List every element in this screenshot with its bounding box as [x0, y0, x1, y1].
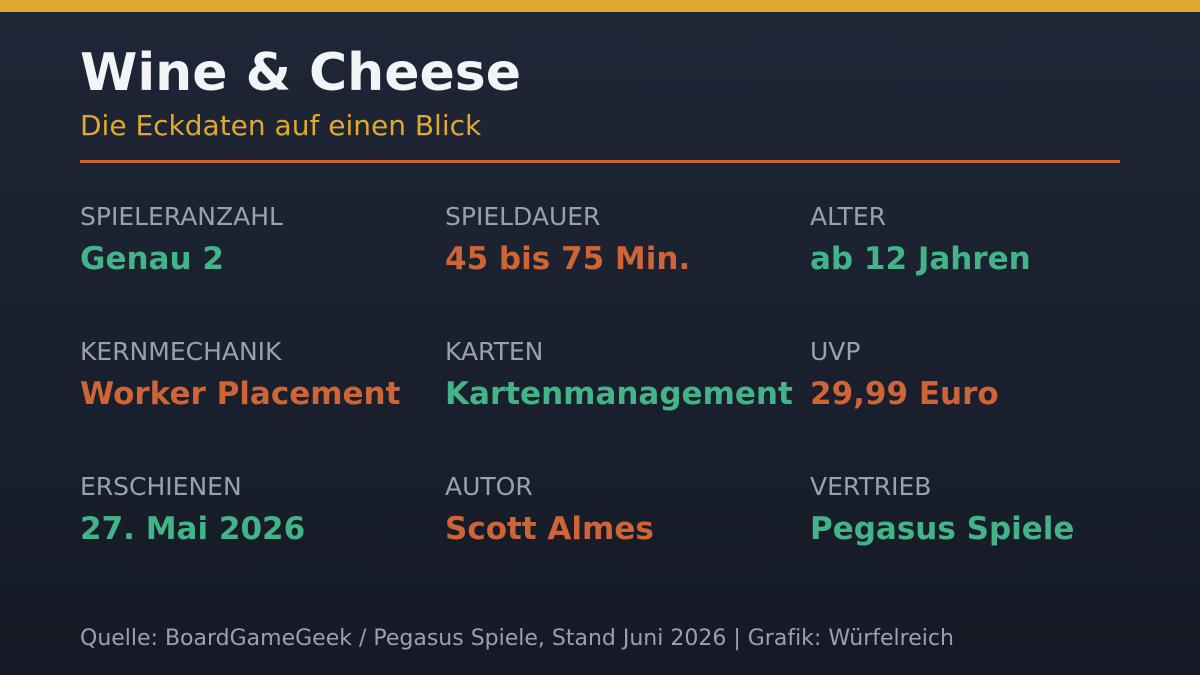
fact: Alter: ALTER	[810, 202, 886, 231]
fact: Spieleranzahl: Genau 2	[80, 241, 224, 277]
fact: UVP: 29,99 Euro	[810, 376, 999, 412]
fact: Erschienen: ERSCHIENEN	[80, 472, 242, 501]
fact: Kernmechanik	[80, 337, 401, 412]
fact: Karten: KARTEN	[445, 337, 543, 366]
fact: Alter: ab 12 Jahren	[810, 241, 1031, 277]
top accent bar	[0, 0, 1200, 12]
fact: UVP: UVP	[810, 337, 860, 366]
header divider	[80, 160, 1120, 163]
fact: Vertrieb: VERTRIEB	[810, 472, 931, 501]
fact: Kernmechanik: KERNMECHANIK	[80, 337, 282, 366]
fact: Autor	[445, 472, 654, 547]
fact: Spieldauer: 45 bis 75 Min.	[445, 241, 690, 277]
fact: Autor: AUTOR	[445, 472, 533, 501]
fact: Vertrieb: Pegasus Spiele	[810, 511, 1074, 547]
fact: Spieleranzahl: SPIELERANZAHL	[80, 202, 283, 231]
fact: Vertrieb	[810, 472, 1074, 547]
fact: Spieldauer	[445, 202, 690, 277]
fact: Spieldauer: SPIELDAUER	[445, 202, 600, 231]
fact: Erschienen	[80, 472, 305, 547]
fact: UVP	[810, 337, 999, 412]
fact: Alter	[810, 202, 1031, 277]
fact: Kernmechanik: Worker Placement	[80, 376, 401, 412]
source footer: Quelle: BoardGameGeek / Pegasus Spiele, Stand Juni 2026 | Grafik: Würfelreich	[80, 626, 954, 651]
fact: Spieleranzahl	[80, 202, 283, 277]
title: Wine & Cheese	[80, 43, 521, 103]
fact: Erschienen: 27. Mai 2026	[80, 511, 305, 547]
fact: Autor: Scott Almes	[445, 511, 654, 547]
fact: Karten	[445, 337, 793, 412]
fact: Karten: Kartenmanagement	[445, 376, 793, 412]
subtitle: Die Eckdaten auf einen Blick	[80, 109, 482, 142]
